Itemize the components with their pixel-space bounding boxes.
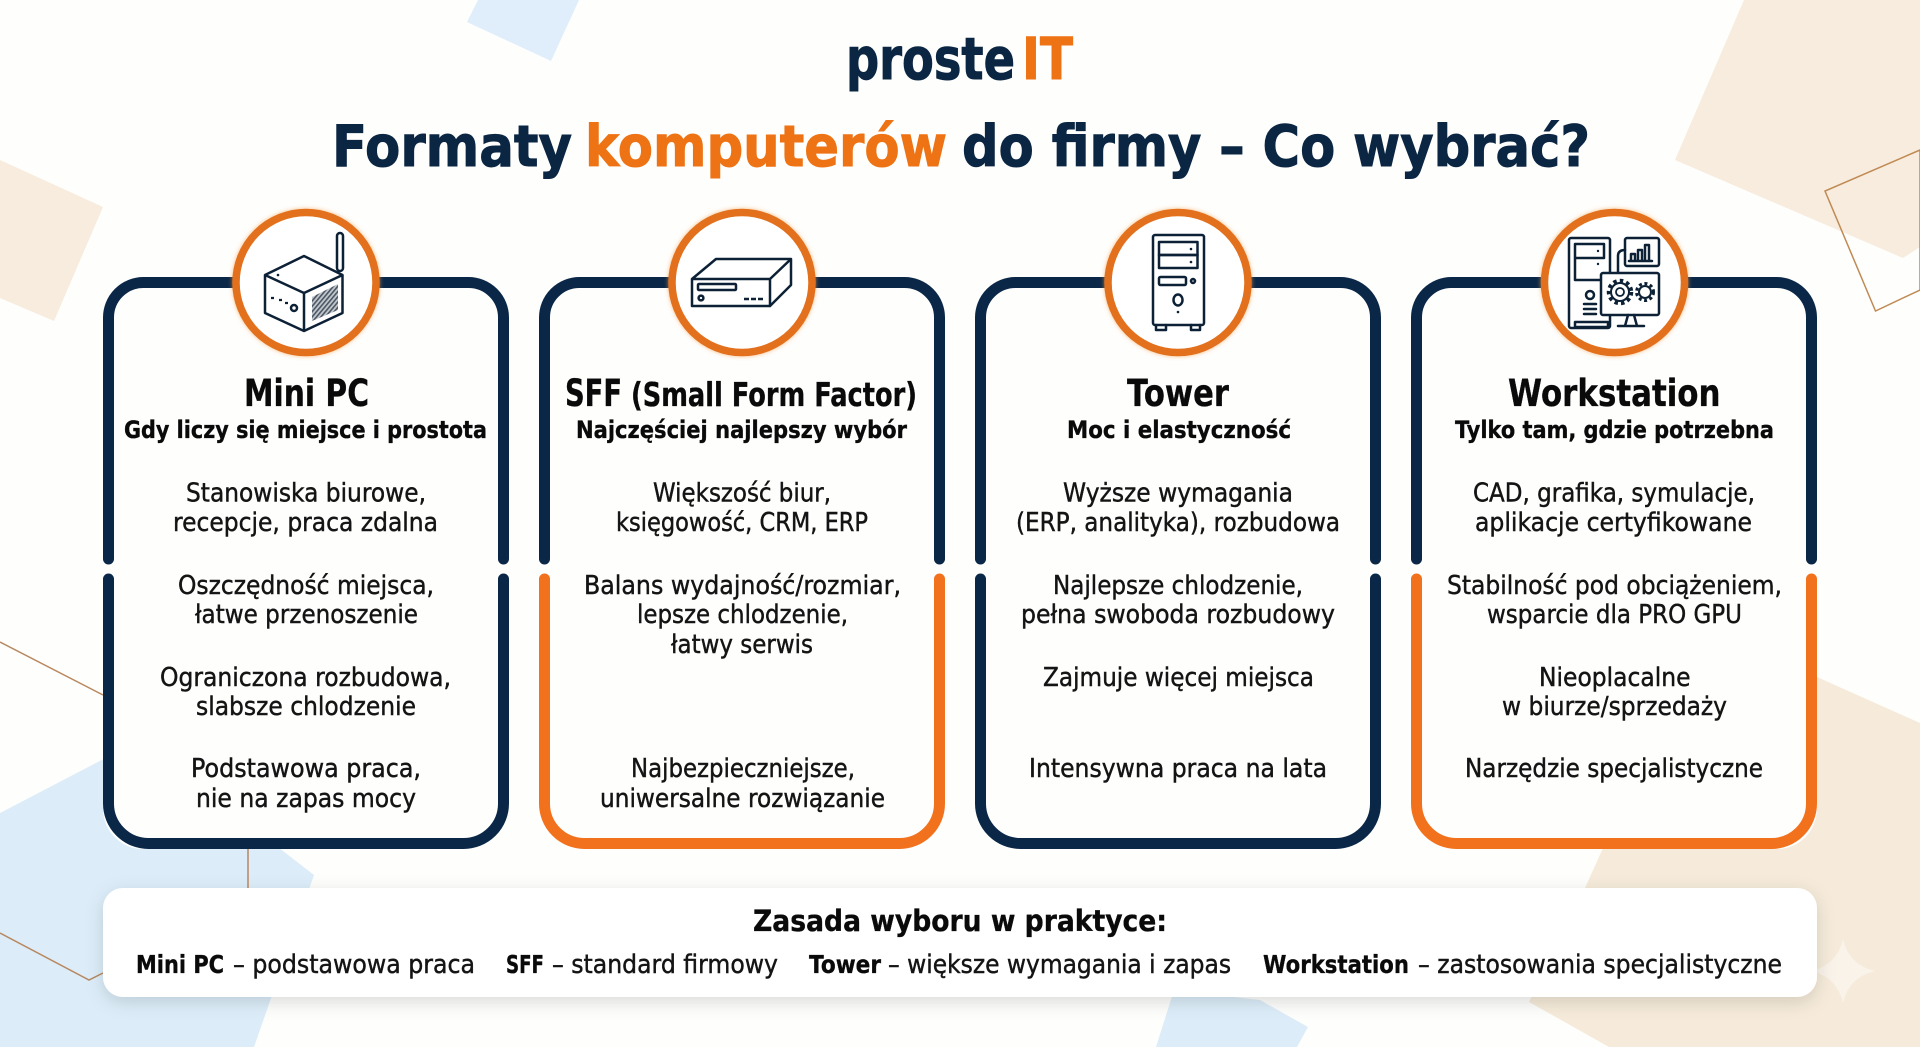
- text: limitations: Ograniczona rozbudowa,: [160, 663, 451, 693]
- summary: Workstation: Workstation: [1263, 950, 1409, 979]
- text: advantages: Stabilność pod obciążeniem,: [1447, 571, 1782, 601]
- summary: SFF: SFF: [506, 950, 544, 979]
- text: use cases: [173, 478, 438, 538]
- logo: proste: [846, 25, 1015, 93]
- text: limitations: [1502, 663, 1727, 722]
- text: limitations: slabsze chlodzenie: [196, 692, 416, 722]
- text: advantages: łatwy serwis: [671, 630, 813, 660]
- card subtitle: Tylko tam, gdzie potrzebna: [1455, 416, 1774, 444]
- title: [332, 114, 1590, 180]
- text: recommendation: Podstawowa praca,: [191, 754, 421, 784]
- text: advantages: [178, 571, 434, 630]
- summary: Mini PC: – podstawowa praca: [233, 950, 475, 980]
- summary: Mini PC: Mini PC: [136, 950, 224, 979]
- card title: Tower: [1127, 372, 1230, 415]
- panel: summary rule: [103, 888, 1817, 997]
- text: recommendation: Najbezpieczniejsze,: [631, 754, 855, 784]
- text: limitations: w biurze/sprzedaży: [1502, 692, 1727, 722]
- panel: SFF: [539, 212, 945, 849]
- icon: mini PC: [236, 212, 376, 352]
- text: recommendation: uniwersalne rozwiązanie: [600, 784, 885, 814]
- card frame: [975, 277, 1381, 849]
- card subtitle: Najczęściej najlepszy wybór: [576, 416, 907, 444]
- text: use cases: [616, 478, 868, 538]
- summary: Workstation: [1263, 950, 1782, 980]
- card frame: [539, 277, 945, 849]
- text: advantages: lepsze chlodzenie,: [637, 600, 848, 630]
- summary: SFF: – standard firmowy: [552, 950, 778, 980]
- card title: Mini PC: [244, 372, 369, 415]
- summary: Mini PC: [136, 950, 475, 980]
- text: use cases: (ERP, analityka), rozbudowa: [1016, 508, 1340, 538]
- title: komputerów: [585, 114, 947, 180]
- card title: Workstation: [1508, 372, 1720, 415]
- text: advantages: Najlepsze chlodzenie,: [1053, 571, 1303, 601]
- text: use cases: księgowość, CRM, ERP: [616, 508, 868, 538]
- icon: SFF desktop: [672, 212, 812, 352]
- icon: tower case: [1108, 212, 1248, 352]
- card title: (Small Form Factor): [631, 375, 917, 414]
- text: advantages: [1021, 571, 1335, 630]
- card subtitle: Gdy liczy się miejsce i prostota: [124, 416, 487, 444]
- text: use cases: aplikacje certyfikowane: [1475, 508, 1752, 538]
- card title: SFF: [565, 372, 622, 415]
- panel: Tower: [975, 212, 1381, 849]
- text: recommendation: [191, 754, 421, 814]
- text: advantages: Oszczędność miejsca,: [178, 571, 434, 601]
- logo: IT: [1022, 25, 1073, 93]
- summary: Workstation: – zastosowania specjalistyczne: [1418, 950, 1782, 980]
- text: advantages: [584, 571, 901, 660]
- title: do firmy – Co wybrać?: [962, 114, 1590, 180]
- text: advantages: Balans wydajność/rozmiar,: [584, 571, 901, 601]
- text: recommendation: nie na zapas mocy: [196, 784, 416, 814]
- text: advantages: pełna swoboda rozbudowy: [1021, 600, 1335, 630]
- summary background: [103, 888, 1817, 997]
- summary: Tower: – większe wymagania i zapas: [888, 950, 1231, 980]
- text: advantages: łatwe przenoszenie: [195, 600, 418, 630]
- summary: Tower: Tower: [809, 950, 882, 979]
- card title: [565, 372, 917, 415]
- text: limitations: Nieoplacalne: [1539, 663, 1690, 693]
- text: use cases: [1016, 478, 1340, 538]
- text: use cases: CAD, grafika, symulacje,: [1473, 478, 1755, 508]
- text: use cases: recepcje, praca zdalna: [173, 508, 438, 538]
- text: recommendation: [600, 754, 885, 814]
- text: use cases: Wyższe wymagania: [1063, 478, 1293, 508]
- text: advantages: [1447, 571, 1782, 630]
- text: recommendation: Intensywna praca na lata: [1029, 754, 1327, 784]
- text: recommendation: Narzędzie specjalistyczne: [1465, 754, 1763, 784]
- panel: Workstation: [1411, 212, 1817, 849]
- panel: Mini PC: [103, 212, 509, 849]
- card subtitle: Moc i elastyczność: [1067, 416, 1291, 444]
- text: use cases: Większość biur,: [653, 478, 831, 508]
- card frame: [103, 277, 509, 849]
- title: Formaty: [332, 114, 572, 180]
- icon: workstation: [1544, 212, 1684, 352]
- text: limitations: [160, 663, 451, 722]
- summary heading: Zasada wyboru w praktyce:: [753, 904, 1167, 938]
- card frame: [1411, 277, 1817, 849]
- text: limitations: Zajmuje więcej miejsca: [1043, 663, 1314, 693]
- text: use cases: Stanowiska biurowe,: [186, 478, 426, 508]
- text: use cases: [1473, 478, 1755, 538]
- text: advantages: wsparcie dla PRO GPU: [1487, 600, 1742, 630]
